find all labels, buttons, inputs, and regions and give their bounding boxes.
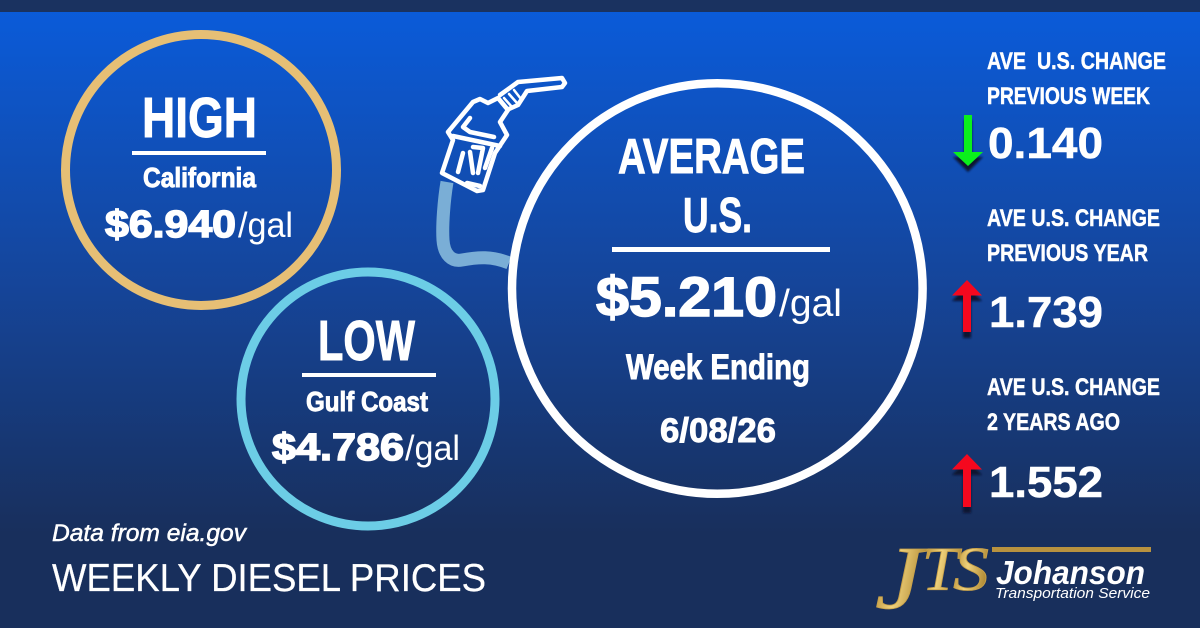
price: high: $6.940	[105, 204, 236, 246]
stat: change previous year: 1.739	[989, 288, 1103, 337]
logo: Johanson Transportation Service: T	[922, 536, 963, 604]
price: low: $4.786	[272, 427, 404, 469]
icon: red up arrow	[952, 280, 982, 338]
label: California: California	[143, 162, 256, 193]
label: date: 6/08/26	[660, 412, 776, 450]
unit: per gallon: /gal	[779, 283, 842, 325]
heading: HIGH: HIGH	[142, 86, 257, 150]
stat: change previous year: AVE U.S. CHANGE	[987, 205, 1160, 232]
icon: red up arrow	[952, 454, 982, 513]
source note: Data from eia.gov	[52, 520, 248, 547]
panel: average price circle	[512, 83, 923, 494]
stat: change previous year	[952, 205, 1160, 338]
unit: per gallon: /gal	[238, 206, 293, 245]
stat: change previous week: AVE U.S. CHANGE	[987, 48, 1166, 75]
logo: Johanson Transportation Service: J	[875, 529, 928, 628]
stat: change 2 years ago: AVE U.S. CHANGE	[987, 374, 1160, 401]
panel: high price circle	[66, 34, 336, 306]
panel: low price circle	[241, 272, 495, 526]
icon: green down arrow	[953, 115, 983, 172]
logo: Johanson Transportation Service: Transportation Service	[995, 585, 1150, 602]
logo: Johanson Transportation Service: S	[953, 536, 989, 604]
stat: change 2 years ago: 1.552	[989, 458, 1103, 507]
price: average: $5.210	[596, 265, 777, 328]
icon: fuel hose	[443, 182, 509, 263]
stat: change 2 years ago: 2 YEARS AGO	[987, 409, 1120, 436]
stat: change previous year: PREVIOUS YEAR	[987, 240, 1148, 267]
stat: change 2 years ago	[952, 374, 1160, 513]
icon: fuel nozzle	[442, 78, 565, 191]
heading: LOW: LOW	[318, 309, 415, 373]
logo: Johanson Transportation Service: Johanson	[996, 554, 1145, 591]
stat: change previous week	[953, 48, 1166, 172]
label: Gulf Coast: Gulf Coast	[306, 386, 428, 417]
label: week ending: Week Ending	[626, 348, 810, 387]
title: WEEKLY DIESEL PRICES	[52, 557, 486, 600]
logo: Johanson Transportation Service	[875, 529, 1151, 628]
unit: per gallon: /gal	[405, 429, 460, 468]
heading: AVERAGE: AVERAGE	[618, 130, 805, 184]
stat: change previous week: PREVIOUS WEEK	[987, 83, 1151, 110]
heading: U.S.: U.S.	[683, 189, 752, 243]
stat: change previous week: 0.140	[988, 119, 1103, 168]
